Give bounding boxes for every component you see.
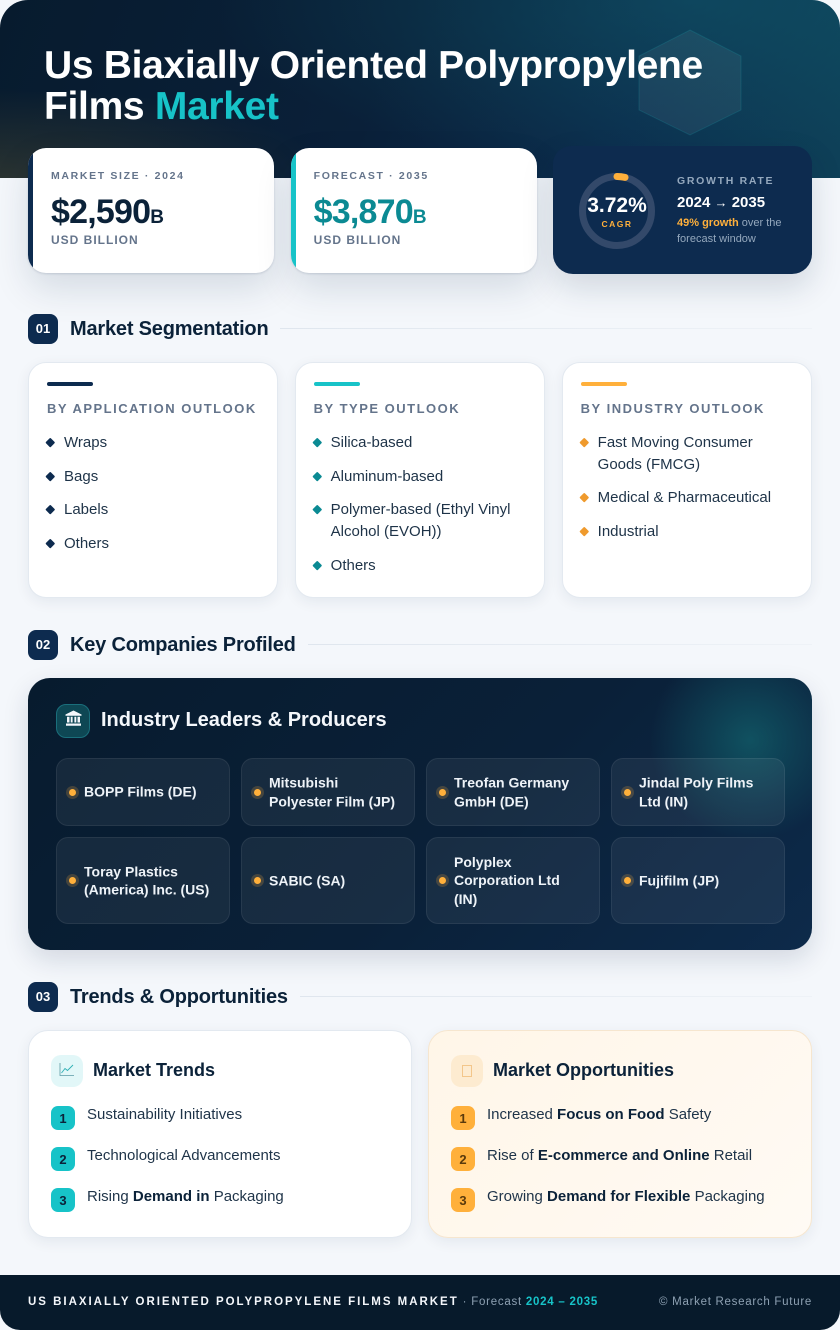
panel: market opportunities	[428, 1030, 812, 1238]
stat card: forecast	[291, 148, 537, 273]
CAGR label: CAGR	[601, 219, 633, 229]
company tiles: Toray Plastics (America) Inc. (US)	[84, 863, 209, 898]
panel: industry outlook: Industrial	[598, 523, 659, 540]
panel: application outlook	[28, 362, 278, 598]
stat card: market size	[28, 148, 274, 273]
opportunity item 2: 2	[459, 1152, 467, 1167]
header banner	[0, 0, 840, 178]
chart: CAGR ring	[579, 173, 655, 249]
panel: type outlook: BY TYPE OUTLOOK	[314, 401, 460, 416]
trend item 1: Sustainability Initiatives	[87, 1106, 242, 1123]
panel: type outlook: Silica-based	[331, 434, 412, 451]
icon: decorative hexagon	[638, 30, 742, 136]
growth note: forecast window	[677, 233, 756, 245]
section heading: key companies: Key Companies Profiled	[70, 634, 296, 656]
company tiles: Jindal Poly Films Ltd (IN)	[639, 774, 753, 809]
panel: industry outlook: Fast Moving Consumer	[598, 434, 753, 451]
section heading: market segmentation	[28, 314, 740, 344]
stat card: market size: $2,590B	[51, 193, 164, 231]
stat card: forecast: $3,870B	[314, 193, 427, 231]
panel: application outlook: Wraps	[64, 434, 107, 451]
panel: application outlook: Labels	[64, 501, 108, 518]
trend item 2: 2	[59, 1152, 67, 1167]
opportunity item 1: Increased Focus on Food Safety	[487, 1106, 711, 1123]
icon: institution	[56, 704, 90, 738]
company tiles	[56, 758, 785, 924]
section heading: market segmentation: Market Segmentation	[70, 318, 268, 340]
footer title: US BIAXIALLY ORIENTED POLYPROPYLENE FILMS MARKET · Forecast 2024 – 2035	[28, 1296, 598, 1308]
section heading: market segmentation: 01	[36, 321, 50, 336]
panel: industry leaders	[28, 678, 812, 950]
panel: market trends	[28, 1030, 412, 1238]
opportunity item 3: Growing Demand for Flexible Packaging	[487, 1188, 765, 1205]
trend item 3: 3	[59, 1193, 67, 1208]
company tiles: SABIC (SA)	[269, 872, 345, 888]
company tiles: Mitsubishi Polyester Film (JP)	[269, 774, 395, 809]
section heading: key companies: 02	[36, 637, 50, 652]
icon: opportunity	[451, 1055, 483, 1087]
panel: application outlook: Others	[64, 535, 109, 552]
heading: Market Trends	[93, 1060, 215, 1080]
company tiles: Treofan Germany GmbH (DE)	[454, 774, 569, 809]
section heading: trends: Trends & Opportunities	[70, 986, 288, 1008]
panel: application outlook: Bags	[64, 468, 98, 485]
trend item 3: Rising Demand in Packaging	[87, 1188, 284, 1205]
opportunity item 1	[451, 1106, 712, 1130]
panel: industry outlook: Medical & Pharmaceutical	[598, 489, 771, 506]
panel: industry outlook: BY INDUSTRY OUTLOOK	[581, 401, 765, 416]
panel heading: Industry Leaders & Producers	[101, 709, 387, 731]
period: 2024 → 2035	[677, 194, 765, 211]
section heading: key companies	[28, 630, 740, 660]
panel: type outlook: Others	[331, 557, 376, 574]
panel: industry outlook: Goods (FMCG)	[598, 456, 700, 473]
section heading: trends: 03	[36, 989, 50, 1004]
title: Us Biaxially Oriented Polypropylene	[44, 44, 703, 87]
stat card: forecast: FORECAST · 2035	[314, 170, 429, 182]
title	[44, 44, 703, 128]
panel: industry outlook	[562, 362, 812, 598]
trend item 3	[51, 1188, 284, 1212]
CAGR value: 3.72%	[587, 194, 647, 217]
trend item 2: Technological Advancements	[87, 1147, 280, 1164]
section heading: trends	[28, 982, 740, 1012]
panel: type outlook: Polymer-based (Ethyl Vinyl	[331, 501, 510, 518]
stat card: growth rate	[553, 146, 812, 274]
trend item 2	[51, 1147, 280, 1171]
company tiles: Polyplex Corporation Ltd (IN)	[454, 854, 560, 907]
opportunity item 3: 3	[459, 1193, 467, 1208]
title: Films Market	[44, 85, 279, 128]
trend item 1	[51, 1106, 242, 1130]
panel: type outlook: Aluminum-based	[331, 468, 443, 485]
company tiles: Fujifilm (JP)	[639, 872, 719, 888]
opportunity item 2	[451, 1147, 752, 1171]
icon: chart	[51, 1055, 83, 1087]
stat card: market size: USD BILLION	[51, 233, 139, 247]
opportunity item 2: Rise of E-commerce and Online Retail	[487, 1147, 752, 1164]
panel: application outlook: BY APPLICATION OUTLOOK	[47, 401, 257, 416]
stat card: forecast: USD BILLION	[314, 233, 401, 247]
footer	[0, 1275, 840, 1330]
trend item 1: 1	[59, 1111, 67, 1126]
growth note: 49% growth over the	[677, 217, 782, 229]
heading: Market Opportunities	[493, 1060, 674, 1080]
company tiles: BOPP Films (DE)	[84, 784, 197, 800]
growth note	[677, 217, 782, 245]
opportunity item 3	[451, 1188, 765, 1212]
panel: type outlook	[295, 362, 545, 598]
growth rate label: GROWTH RATE	[677, 175, 774, 187]
opportunity item 1: 1	[459, 1111, 467, 1126]
footer credit: © Market Research Future	[659, 1296, 812, 1308]
stat card: market size: MARKET SIZE · 2024	[51, 170, 185, 182]
panel: type outlook: Alcohol (EVOH))	[331, 523, 442, 540]
